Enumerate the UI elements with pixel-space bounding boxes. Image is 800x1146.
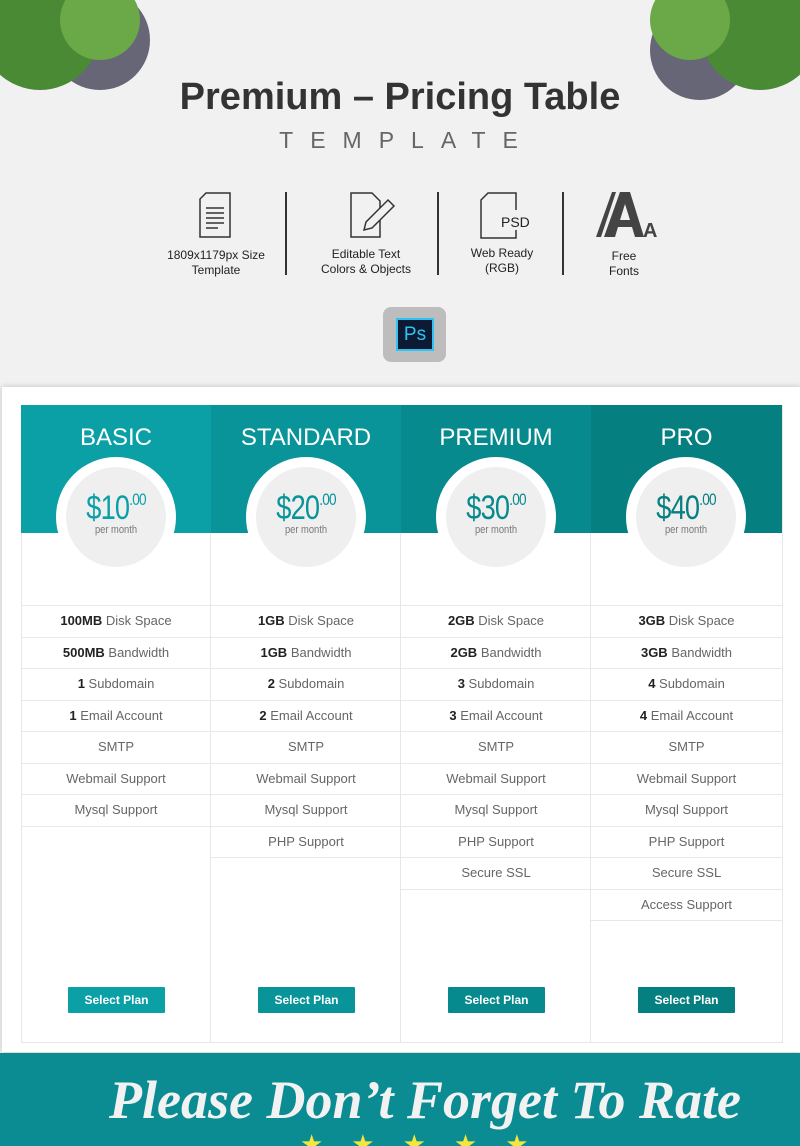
banner: rate bbox=[0, 1053, 800, 1146]
subtitle: TEMPLATE bbox=[279, 127, 535, 153]
column: pro: Access Support bbox=[641, 896, 732, 912]
icon: psd: PSD bbox=[501, 214, 530, 230]
column: premium: Select Plan bbox=[464, 993, 529, 1007]
icon: fonts bbox=[596, 192, 657, 238]
plant: top right bbox=[650, 0, 800, 100]
text: editable: Colors & Objects bbox=[321, 262, 411, 276]
text: free fonts bbox=[609, 249, 639, 278]
column: standard: 2 Subdomain bbox=[268, 676, 344, 691]
column: premium: 3 Subdomain bbox=[458, 676, 534, 691]
text: editable: Editable Text bbox=[332, 247, 400, 261]
column: basic: Mysql Support bbox=[74, 802, 158, 817]
column: basic: 1 Email Account bbox=[69, 708, 163, 722]
column: standard: per month bbox=[285, 524, 327, 536]
icon: psd bbox=[480, 192, 530, 239]
column: standard bbox=[211, 405, 401, 1042]
column: standard: Webmail Support bbox=[256, 770, 356, 786]
column: pro bbox=[591, 405, 782, 1013]
column: standard: Mysql Support bbox=[264, 802, 348, 817]
column: pro: 4 Subdomain bbox=[648, 676, 725, 691]
column: premium: PREMIUM bbox=[439, 424, 553, 451]
column: premium: Webmail Support bbox=[446, 770, 546, 786]
text: web ready: Web Ready bbox=[471, 246, 533, 260]
icon: edit bbox=[350, 192, 395, 238]
column: standard: Select Plan bbox=[274, 993, 339, 1007]
text: free fonts: Free bbox=[612, 249, 636, 263]
banner: rate: Please Don’t Forget To Rate bbox=[109, 1070, 741, 1130]
column: basic: 100MB Disk Space bbox=[60, 613, 172, 628]
icon: photoshop: Ps bbox=[404, 324, 426, 345]
column: premium bbox=[401, 405, 591, 1042]
column: pro: SMTP bbox=[668, 739, 705, 754]
column: basic: per month bbox=[95, 524, 137, 536]
text: free fonts: Fonts bbox=[609, 264, 639, 278]
title: Premium – Pricing Table bbox=[180, 76, 620, 118]
column: pro: Select Plan bbox=[654, 993, 719, 1007]
column: pro: 3GB Bandwidth bbox=[641, 644, 732, 660]
column: basic: 1 Subdomain bbox=[78, 676, 154, 691]
text: size: 1809x1179px Size bbox=[167, 248, 265, 262]
column: pro: Mysql Support bbox=[645, 802, 728, 817]
column: standard: 2 Email Account bbox=[259, 708, 353, 722]
column: standard: STANDARD bbox=[241, 424, 371, 451]
column: pro: 4 Email Account bbox=[640, 708, 733, 722]
column: standard: PHP Support bbox=[268, 834, 344, 848]
column: pro: $40.00 bbox=[656, 489, 716, 527]
column: basic: Select Plan bbox=[84, 993, 149, 1007]
icon: photoshop bbox=[383, 307, 446, 362]
column: basic: Webmail Support bbox=[66, 770, 166, 786]
column: basic bbox=[21, 405, 211, 1042]
column: basic: 500MB Bandwidth bbox=[63, 644, 169, 660]
column: premium: $30.00 bbox=[466, 489, 526, 527]
column: pro: 3GB Disk Space bbox=[638, 613, 735, 628]
column: standard: $20.00 bbox=[276, 489, 336, 527]
column: premium: 2GB Disk Space bbox=[448, 613, 544, 628]
column: premium: Secure SSL bbox=[461, 865, 531, 880]
text: size: Template bbox=[192, 263, 240, 277]
text: size bbox=[167, 248, 265, 277]
column: pro: PRO bbox=[660, 424, 712, 451]
pricing card bbox=[2, 387, 800, 1052]
column: standard: SMTP bbox=[288, 739, 324, 754]
column: premium: PHP Support bbox=[458, 834, 534, 848]
column: premium: Mysql Support bbox=[454, 802, 538, 817]
column: pro: PHP Support bbox=[649, 834, 724, 848]
column: premium: per month bbox=[475, 524, 517, 536]
text: editable bbox=[321, 247, 411, 276]
features row bbox=[167, 192, 657, 278]
column: standard: 1GB Disk Space bbox=[258, 613, 354, 628]
column: standard: 1GB Bandwidth bbox=[260, 644, 352, 660]
text: web ready bbox=[470, 246, 534, 275]
text: web ready: (RGB) bbox=[485, 261, 519, 275]
column: basic: BASIC bbox=[80, 424, 152, 451]
column: basic: SMTP bbox=[98, 739, 134, 754]
column: premium: SMTP bbox=[478, 739, 514, 754]
icon: document bbox=[199, 192, 231, 238]
column: premium: 3 Email Account bbox=[449, 708, 543, 722]
column: basic: $10.00 bbox=[86, 489, 146, 527]
column: pro: Webmail Support bbox=[637, 770, 736, 786]
column: premium: 2GB Bandwidth bbox=[450, 644, 542, 660]
plant: top left bbox=[0, 0, 150, 90]
column: pro: Secure SSL bbox=[652, 865, 721, 880]
column: pro: per month bbox=[665, 524, 707, 536]
